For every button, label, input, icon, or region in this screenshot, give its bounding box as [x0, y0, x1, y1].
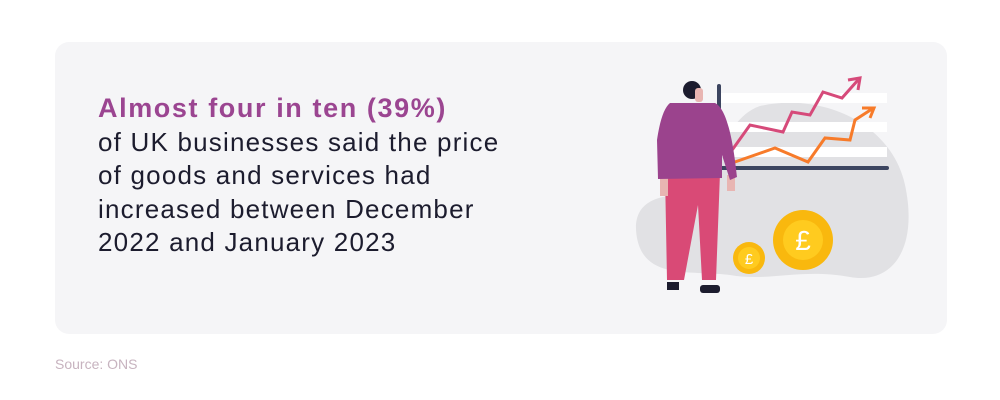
- icon: small pound coin: £: [745, 251, 754, 268]
- background blob: [636, 103, 909, 278]
- source note: Source: ONS: [55, 356, 137, 372]
- icon: small pound coin: [733, 242, 765, 274]
- chart: bars and axes: [719, 86, 887, 168]
- chart: pink line arrow: [730, 78, 860, 153]
- text block: statistic: [98, 93, 499, 257]
- panel: card: [55, 42, 947, 334]
- icon: large pound coin: £: [795, 225, 811, 256]
- text block: statistic: of goods and services had: [98, 160, 432, 190]
- chart: orange line arrow: [732, 108, 874, 163]
- text block: statistic: Almost four in ten (39%): [98, 93, 447, 123]
- person: [657, 81, 737, 293]
- text block: statistic: increased between December: [98, 194, 475, 224]
- text block: statistic: of UK businesses said the price: [98, 126, 499, 156]
- icon: large pound coin: [773, 210, 833, 270]
- text block: statistic: 2022 and January 2023: [98, 227, 396, 257]
